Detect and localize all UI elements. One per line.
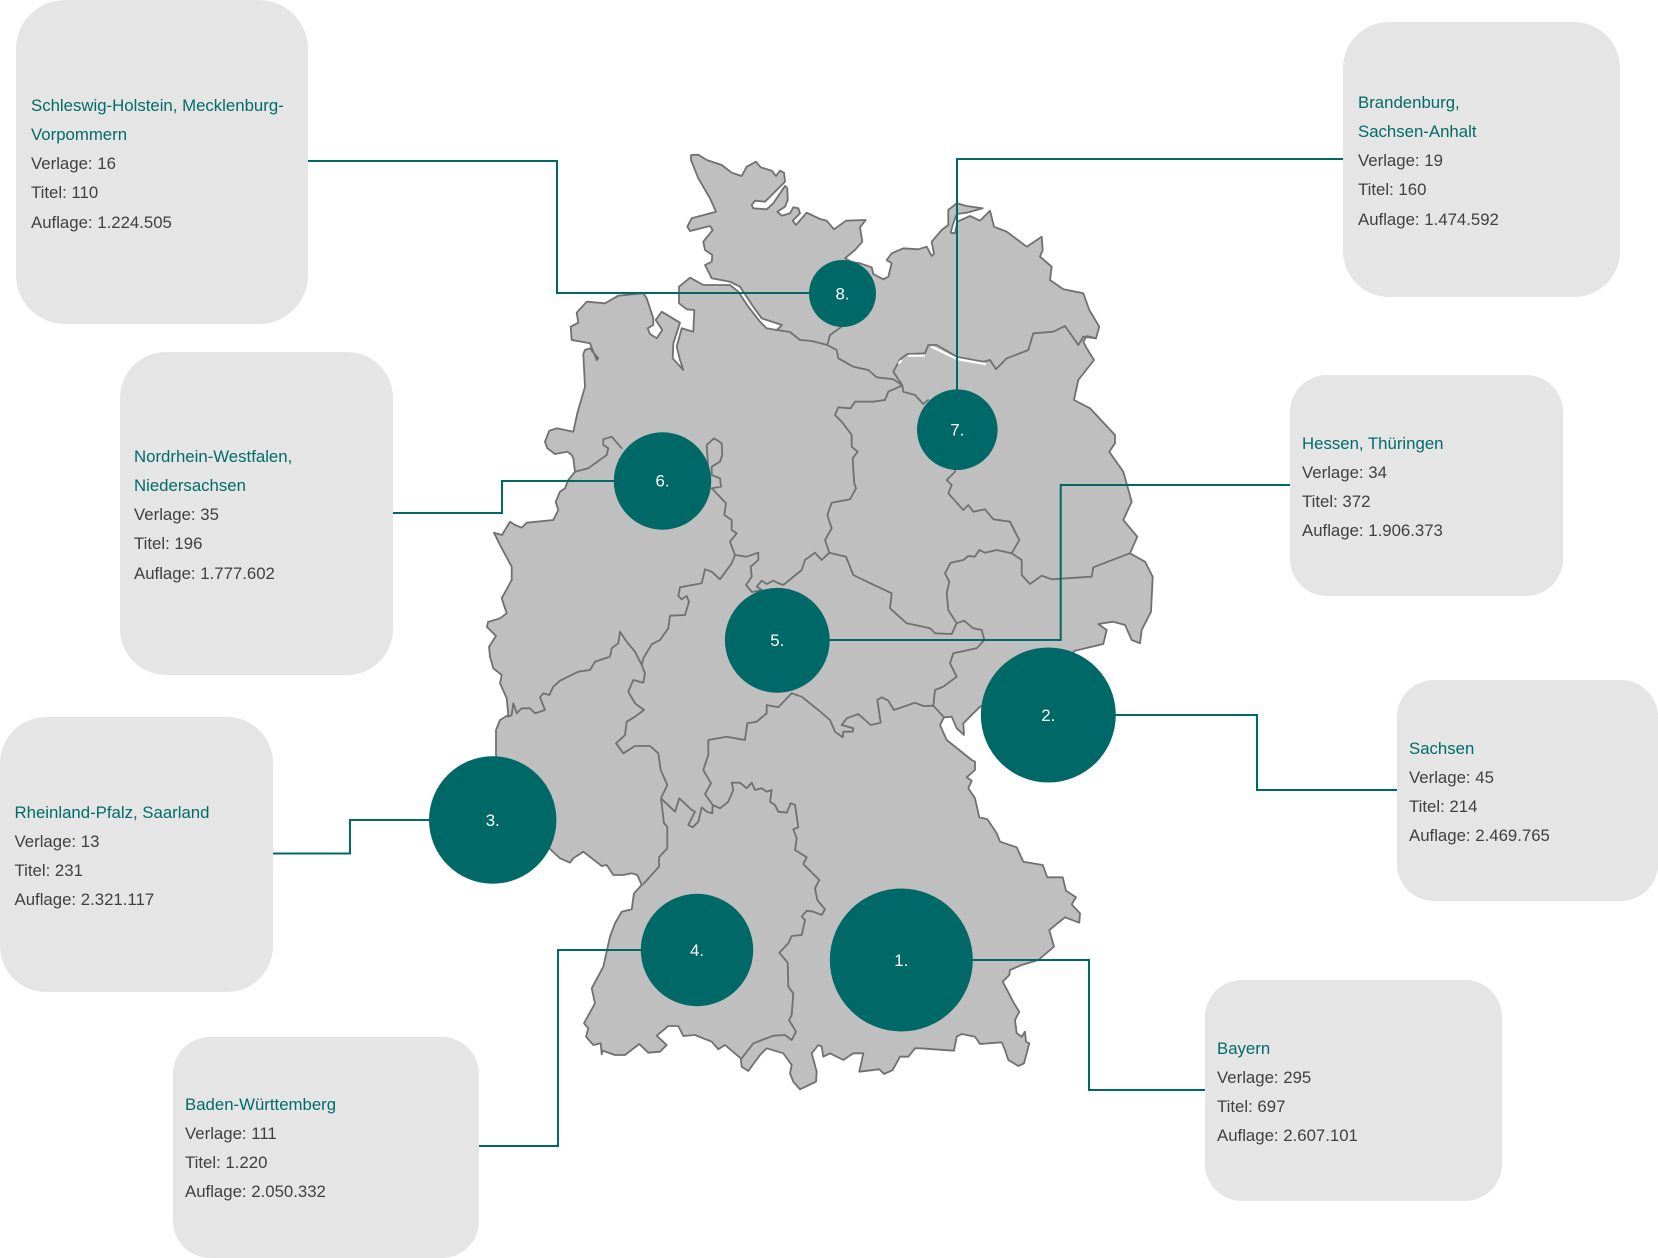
text: Bayern figures: Bayern — [1217, 1038, 1270, 1058]
text: Brandenburg figures: Auflage: 1.474.592 — [1358, 210, 1499, 229]
circle 7 — [917, 389, 998, 470]
text: Rheinland-Pfalz figures — [14, 802, 209, 909]
text: Hessen figures — [1302, 434, 1444, 540]
text: Rheinland-Pfalz figures: Titel: 231 — [14, 861, 83, 880]
circle 5 — [725, 588, 830, 693]
text: Hessen figures: Verlage: 34 — [1302, 463, 1387, 482]
circle 2: 2. — [1041, 706, 1055, 725]
text: Nordrhein-Westfalen figures: Auflage: 1.777.602 — [134, 564, 275, 583]
text: Schleswig-Holstein figures — [31, 96, 284, 232]
text: Brandenburg figures: Brandenburg, — [1358, 92, 1460, 112]
text: Schleswig-Holstein figures: Auflage: 1.224.505 — [31, 213, 172, 232]
text: Sachsen figures: Sachsen — [1409, 738, 1474, 758]
connector: Nordrhein-Westfalen to circle 6 — [393, 481, 620, 513]
text: Hessen figures: Titel: 372 — [1302, 492, 1370, 511]
text: Rheinland-Pfalz figures: Auflage: 2.321.117 — [14, 890, 154, 909]
connector: Brandenburg to circle 7 — [957, 159, 1343, 395]
text: Brandenburg figures: Sachsen-Anhalt — [1358, 122, 1476, 141]
panel: Hessen, Thüringen — [1290, 375, 1563, 596]
circle 1 — [830, 888, 973, 1032]
panel: Brandenburg, Sachsen-Anhalt — [1343, 22, 1620, 297]
text: Schleswig-Holstein figures: Schleswig-Holstein, Mecklenburg- — [31, 96, 284, 114]
text: Baden-Württemberg figures: Baden-Württemberg — [185, 1094, 336, 1114]
text: Baden-Württemberg figures: Titel: 1.220 — [185, 1153, 267, 1172]
circle 1: 1. — [894, 951, 908, 970]
text: Sachsen figures: Verlage: 45 — [1409, 768, 1494, 787]
circle 8: 8. — [836, 284, 850, 304]
panel: Schleswig-Holstein, Mecklenburg-Vorpommern — [16, 0, 308, 324]
connector: Rheinland-Pfalz to circle 3 — [273, 820, 440, 854]
text: Nordrhein-Westfalen figures: Niedersachsen — [134, 476, 246, 495]
circle 6: 6. — [656, 472, 670, 490]
circle 8 — [809, 260, 876, 327]
text: Schleswig-Holstein figures: Verlage: 16 — [31, 154, 116, 173]
text: Schleswig-Holstein figures: Titel: 110 — [31, 183, 98, 202]
panel: Nordrhein-Westfalen, Niedersachsen — [120, 352, 393, 675]
text: Sachsen figures: Titel: 214 — [1409, 797, 1477, 816]
text: Bayern figures: Titel: 697 — [1217, 1097, 1285, 1116]
connector: Hessen to circle 5 — [800, 485, 1290, 640]
panel: Sachsen — [1397, 680, 1658, 901]
text: Baden-Württemberg figures: Auflage: 2.050.332 — [185, 1182, 326, 1201]
circle 4 — [641, 894, 753, 1006]
circle 4: 4. — [690, 941, 704, 960]
connector: Schleswig-Holstein to circle 8 — [308, 161, 815, 293]
circle 7: 7. — [950, 420, 964, 440]
circle 3: 3. — [486, 811, 500, 830]
map of Germany — [487, 155, 1153, 1089]
text: Bayern figures: Auflage: 2.607.101 — [1217, 1126, 1358, 1145]
connector: Bayern to circle 1 — [960, 960, 1205, 1090]
panel: Baden-Württemberg — [173, 1037, 479, 1258]
panel: Rheinland-Pfalz, Saarland — [0, 717, 273, 992]
panel: Bayern — [1205, 980, 1502, 1201]
text: Nordrhein-Westfalen figures: Titel: 196 — [134, 534, 202, 553]
text: Nordrhein-Westfalen figures — [134, 446, 292, 583]
text: Nordrhein-Westfalen figures: Verlage: 35 — [134, 505, 219, 524]
text: Sachsen figures: Auflage: 2.469.765 — [1409, 826, 1550, 845]
text: Baden-Württemberg figures: Verlage: 111 — [185, 1124, 277, 1143]
text: Nordrhein-Westfalen figures: Nordrhein-Westfalen, — [134, 446, 292, 466]
text: Bayern figures — [1217, 1038, 1358, 1145]
circle 5: 5. — [770, 631, 784, 650]
text: Brandenburg figures — [1358, 92, 1499, 229]
text: Brandenburg figures: Titel: 160 — [1358, 180, 1426, 199]
state borders — [508, 326, 1130, 1058]
circle 3 — [429, 756, 556, 884]
circle 6 — [614, 432, 711, 530]
circle 2 — [981, 648, 1116, 782]
connector: Baden-Württemberg to circle 4 — [479, 950, 650, 1146]
connector: Sachsen to circle 2 — [1100, 715, 1397, 790]
text: Schleswig-Holstein figures: Vorpommern — [31, 125, 127, 144]
text: Sachsen figures — [1409, 738, 1550, 845]
text: Hessen figures: Hessen, Thüringen — [1302, 434, 1444, 452]
text: Bayern figures: Verlage: 295 — [1217, 1068, 1311, 1087]
text: Brandenburg figures: Verlage: 19 — [1358, 151, 1443, 170]
map outline — [487, 155, 1153, 1089]
text: Hessen figures: Auflage: 1.906.373 — [1302, 521, 1443, 540]
text: Rheinland-Pfalz figures: Rheinland-Pfalz, Saarland — [14, 802, 209, 822]
text: Baden-Württemberg figures — [185, 1094, 336, 1201]
river gaps — [899, 347, 985, 364]
text: Rheinland-Pfalz figures: Verlage: 13 — [14, 832, 99, 851]
